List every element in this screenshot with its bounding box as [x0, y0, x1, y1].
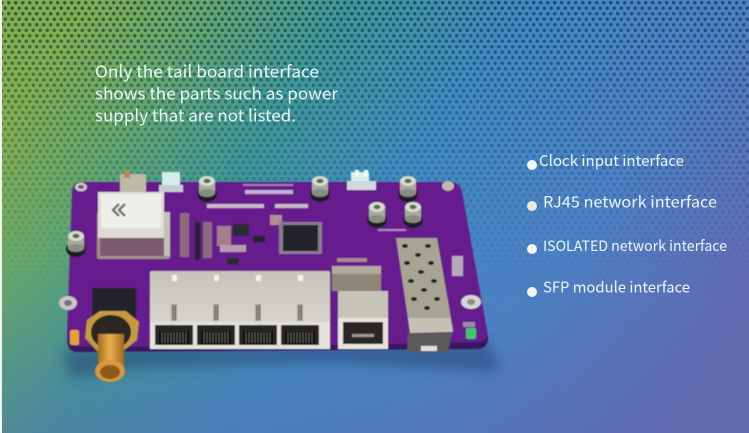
silkscreen and pin headers	[180, 184, 463, 276]
feature: SFP module: SFP module interface	[543, 276, 690, 298]
mounting holes	[59, 181, 481, 310]
transformer	[332, 266, 381, 291]
feature: RJ45 network: RJ45 network interface	[543, 190, 717, 212]
feature: isolated network: ISOLATED network interface	[543, 235, 727, 256]
BNC connector	[70, 288, 139, 382]
board shadow	[62, 344, 500, 378]
main chip	[279, 222, 322, 254]
note text: tail board interface: supply that are not listed.	[95, 102, 296, 126]
crystal oscillator module	[97, 192, 170, 259]
feature: clock input: Clock input interface	[539, 150, 684, 171]
capacitors	[66, 176, 423, 257]
board PCB	[67, 182, 487, 347]
four port RJ45 block	[150, 271, 330, 349]
SFP cage	[396, 238, 453, 352]
isolated RJ45 port	[338, 291, 388, 349]
note text: tail board interface: Only the tail board interface	[95, 58, 319, 82]
circuit board	[59, 170, 488, 382]
feature list	[527, 150, 727, 298]
green LED	[463, 322, 476, 339]
top edge connectors	[120, 170, 376, 192]
note text: tail board interface: shows the parts such as power	[95, 80, 339, 104]
note text: tail board interface	[95, 58, 339, 126]
